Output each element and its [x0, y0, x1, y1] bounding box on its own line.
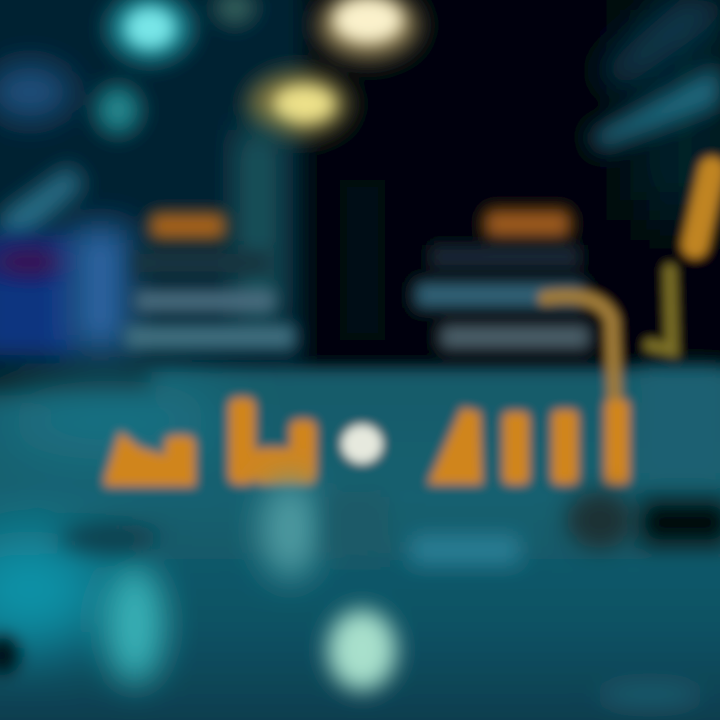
text block: right orange marks [428, 400, 629, 484]
panel: floor reflections [0, 480, 700, 707]
chart: orange trend line [545, 170, 712, 470]
icon: centre white dot [342, 425, 382, 463]
panel: left neon wall [0, 64, 130, 355]
text block: left orange marks [105, 398, 316, 486]
panel: right stacked device [415, 210, 590, 349]
panel: left stacked device [125, 213, 295, 349]
icon: ceiling lights [96, 0, 418, 320]
panel: upper right streaks [590, 0, 720, 545]
